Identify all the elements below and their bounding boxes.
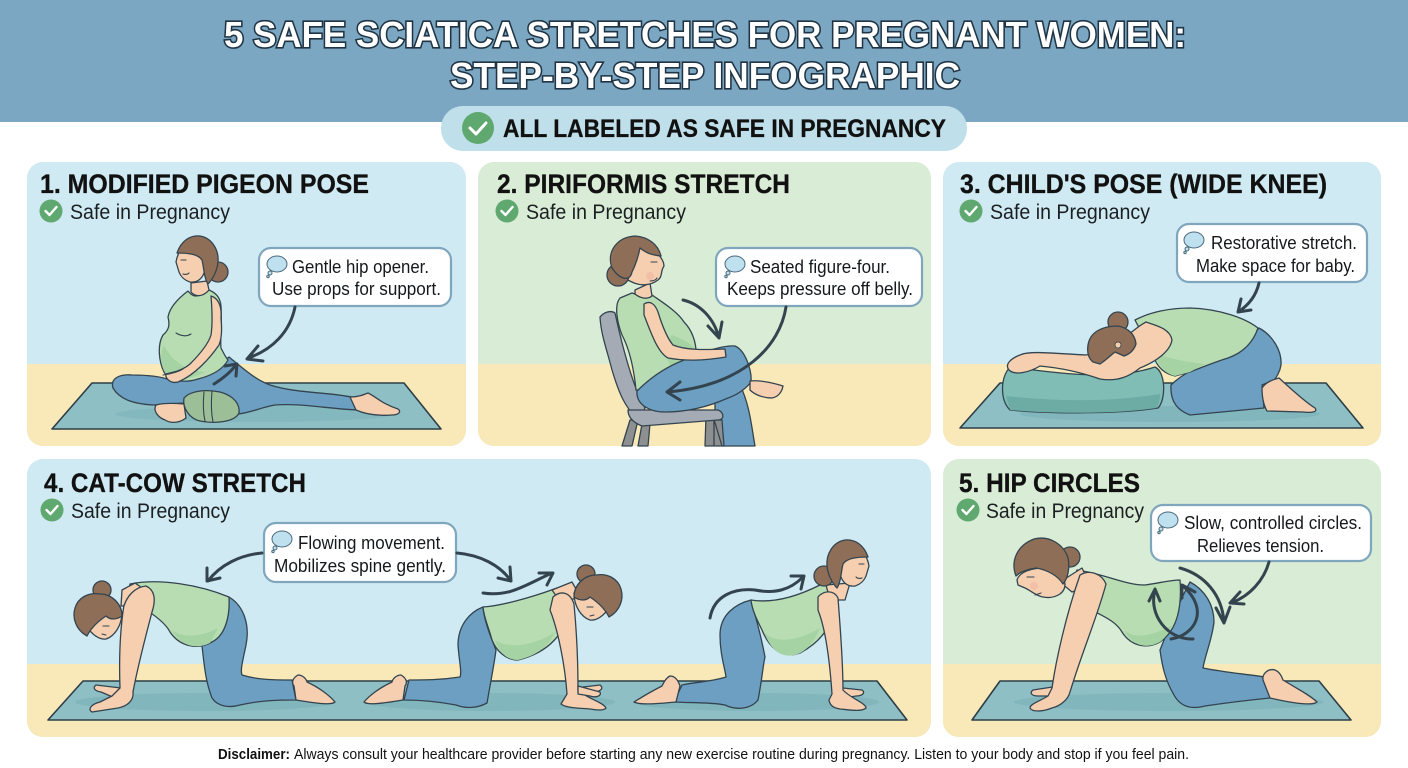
thought icon (725, 256, 745, 278)
callout 4: Mobilizes spine gently. (274, 556, 446, 576)
heading 5: 5. HIP CIRCLES (959, 468, 1140, 498)
callout 2: Seated figure-four. (750, 257, 890, 277)
arrow: callout to hip (667, 307, 786, 400)
thought icon (1158, 512, 1178, 534)
title: 5 SAFE SCIATICA STRETCHES FOR PREGNANT WOMEN: (224, 14, 1186, 55)
heading 2: 2. PIRIFORMIS STRETCH (497, 169, 790, 199)
callout 1 (259, 248, 451, 306)
title: STEP-BY-STEP INFOGRAPHIC (450, 55, 960, 96)
callout 5 (1151, 505, 1371, 561)
yoga mat 4 (48, 681, 907, 720)
callout 3 (1177, 224, 1367, 282)
panel 4: cat-cow stretch (27, 459, 931, 737)
callout 3: Make space for baby. (1196, 256, 1355, 276)
figure: cow pose (right, looking up) (634, 540, 869, 710)
figure: child's pose (1007, 308, 1316, 415)
figure: seated figure-four (607, 236, 783, 446)
thought icon (267, 256, 287, 278)
arrow: callout to cat pose (207, 553, 262, 581)
safety badge pill: ALL LABELED AS SAFE IN PREGNANCY (503, 115, 946, 143)
figure: cow pose (middle) (364, 565, 622, 710)
safe label 5: Safe in Pregnancy (986, 500, 1144, 523)
thought icon (1184, 232, 1204, 254)
arrow: spine wave right (710, 576, 804, 618)
safe label 1: Safe in Pregnancy (70, 201, 230, 224)
heading 4: 4. CAT-COW STRETCH (44, 468, 306, 498)
arrow: curved arrow to knee (683, 300, 722, 338)
figure: hip circles (1014, 538, 1317, 711)
heading 1: 1. MODIFIED PIGEON POSE (40, 169, 369, 199)
yoga mat 1 (52, 383, 441, 429)
callout 1: Use props for support. (272, 279, 441, 299)
disclaimer: Disclaimer: (218, 746, 290, 763)
callout 2: Keeps pressure off belly. (727, 279, 913, 299)
safety badge pill (441, 106, 967, 151)
disclaimer: Always consult your healthcare provider before starting any new exercise routine during pregnancy. Listen to your body and stop if you feel pain. (294, 746, 1189, 763)
title (224, 14, 1186, 96)
panel 1: modified pigeon pose (27, 162, 466, 446)
arrow: callout to back (1238, 283, 1259, 312)
callout 4: Flowing movement. (298, 533, 445, 553)
arrows: hip circle motion (1149, 568, 1230, 639)
callout 5: Relieves tension. (1197, 536, 1324, 556)
arrow: hip stretch (214, 364, 237, 384)
callout 4 (264, 523, 456, 582)
callout 1: Gentle hip opener. (292, 257, 429, 277)
figure: pigeon pose (112, 236, 400, 422)
thought icon (272, 531, 292, 553)
header banner (0, 0, 1408, 122)
arrow: spine wave middle (483, 573, 553, 594)
panel 2: piriformis stretch (478, 162, 931, 446)
safe label 4: Safe in Pregnancy (71, 500, 230, 523)
bolster (1002, 367, 1164, 413)
safe label 3: Safe in Pregnancy (990, 201, 1150, 224)
chair (600, 312, 650, 446)
arrow: callout to cow pose (457, 553, 511, 581)
callout 2 (716, 248, 922, 306)
heading 3: 3. CHILD'S POSE (WIDE KNEE) (960, 169, 1327, 199)
yoga mat 3 (960, 383, 1363, 428)
panel 3: child's pose (943, 162, 1381, 446)
safe label 2: Safe in Pregnancy (526, 201, 686, 224)
callout 3: Restorative stretch. (1211, 233, 1357, 253)
arrow: callout to hip (247, 307, 295, 361)
callout 5: Slow, controlled circles. (1184, 513, 1362, 533)
arrow: callout to hip (1230, 562, 1269, 604)
figure: cat pose (74, 581, 335, 712)
yoga mat 5 (972, 681, 1351, 720)
panel 5: hip circles (943, 459, 1381, 737)
